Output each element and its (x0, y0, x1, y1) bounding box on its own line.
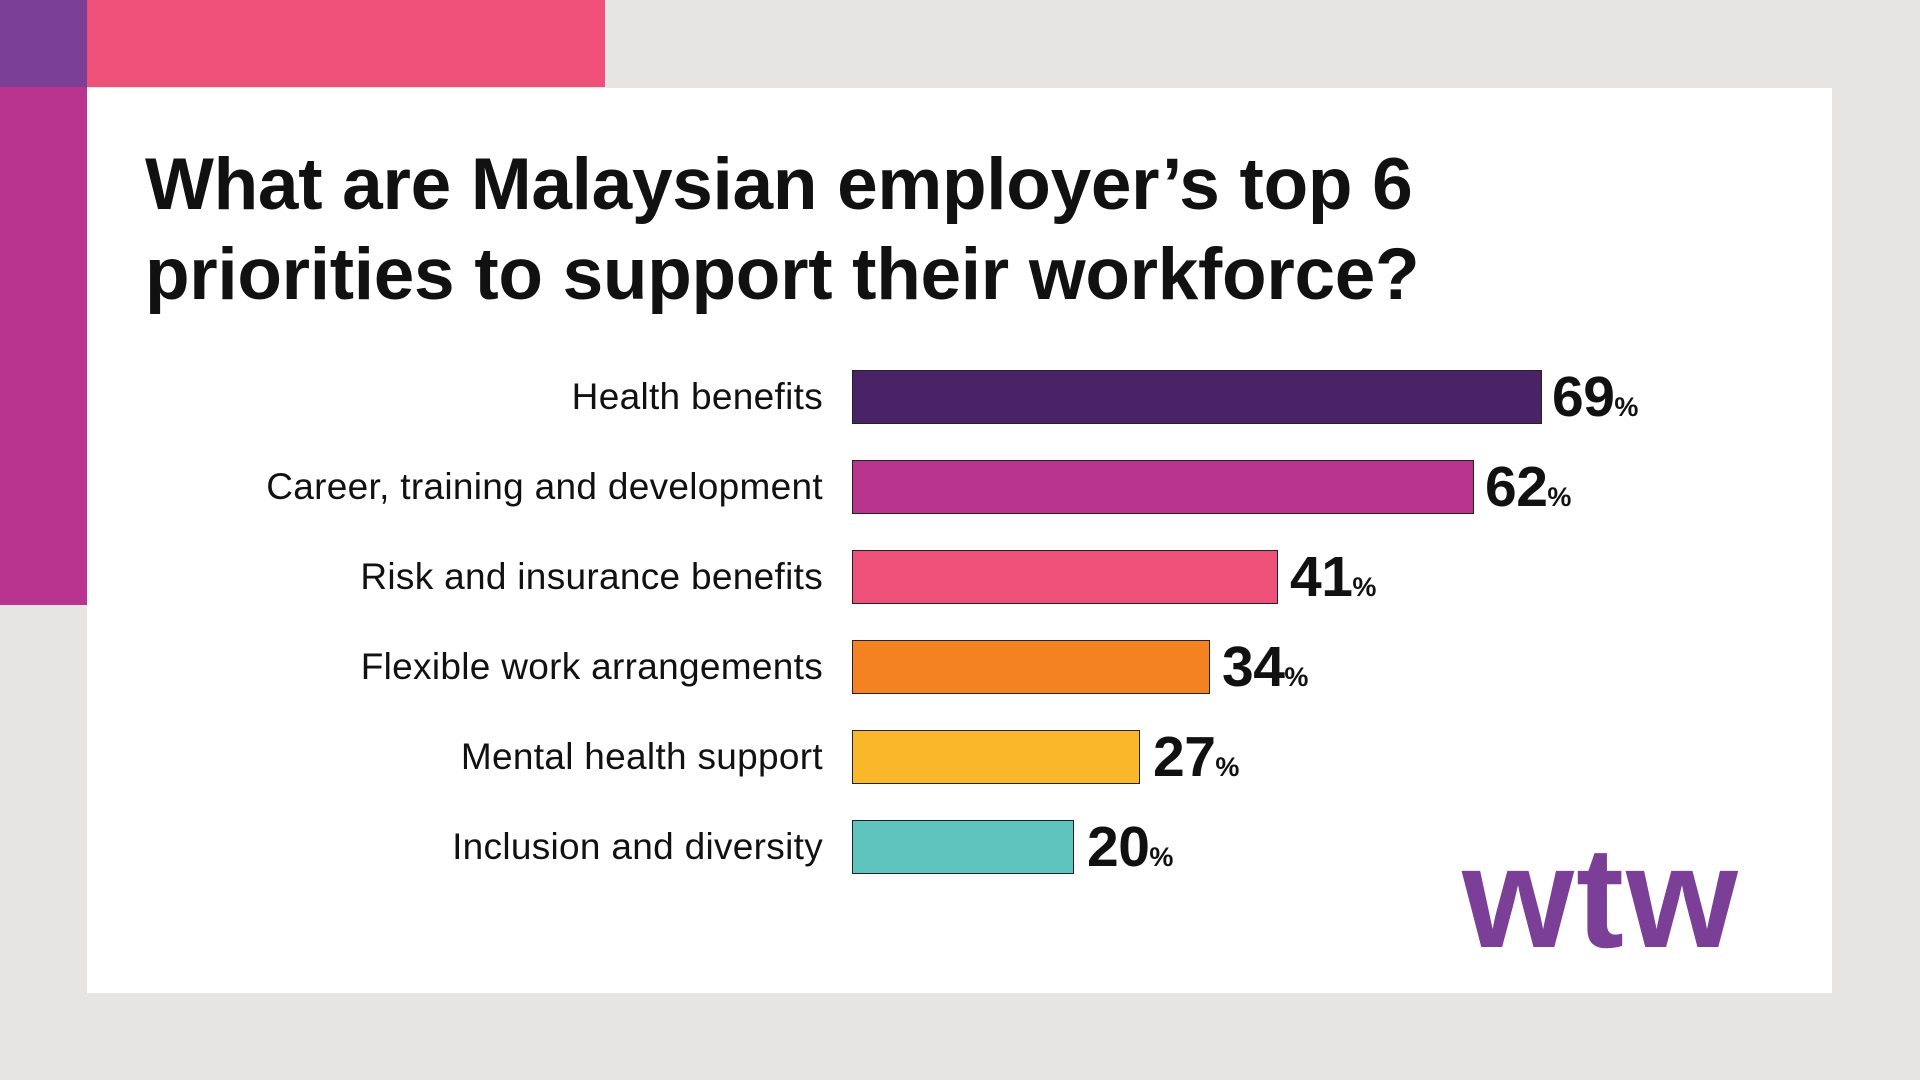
row: Flexible (361, 635, 1308, 699)
panel: white card (87, 88, 1832, 993)
row: Inclusion (452, 815, 1173, 879)
row: Health benefits: 69% (1552, 365, 1638, 429)
row: Risk: Risk and insurance benefits (360, 556, 823, 597)
title: What are Malaysian employer’s top 6 (145, 144, 1412, 225)
row: Flexible: 34% (1222, 635, 1308, 699)
title (145, 144, 1419, 315)
row: Inclusion: Inclusion and diversity (452, 826, 823, 867)
row: Mental health (461, 725, 1239, 789)
row: Flexible: Flexible work arrangements (361, 646, 823, 687)
row: Career: 62% (1485, 455, 1571, 519)
row: Risk: 41% (1290, 545, 1376, 609)
row: Inclusion: 20% (1087, 815, 1173, 879)
decorative top pink block (0, 0, 605, 87)
row: Health benefits: Health benefits (572, 376, 823, 417)
row: Career (266, 455, 1571, 519)
decorative magenta strip (0, 87, 87, 605)
decorative purple corner (0, 0, 87, 87)
row: Mental health: Mental health support (461, 736, 823, 777)
logo: wtw: wtw (1462, 817, 1740, 978)
row: Risk (360, 545, 1376, 609)
row: Mental health: 27% (1153, 725, 1239, 789)
title: priorities to support their workforce? (145, 234, 1419, 315)
row: Health benefits (572, 365, 1638, 429)
row: Career: Career, training and development (266, 466, 823, 507)
